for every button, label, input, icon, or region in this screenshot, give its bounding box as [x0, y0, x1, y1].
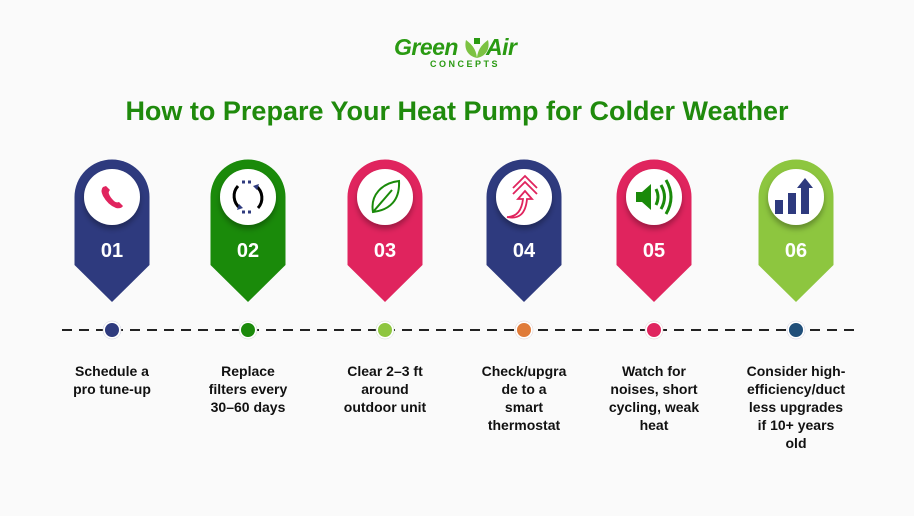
pin 02: 02 — [237, 240, 259, 262]
pin 03 — [348, 160, 422, 339]
label 04: smart — [505, 399, 543, 415]
label 05 — [609, 363, 700, 433]
pin 01 — [74, 160, 150, 339]
label 04: de to a — [501, 381, 547, 397]
pin 05 — [616, 160, 692, 339]
label 06 — [747, 363, 845, 451]
label 06: less upgrades — [749, 399, 843, 415]
label 04 — [482, 363, 566, 433]
label 01 — [73, 363, 151, 397]
pin 03: 03 — [374, 240, 396, 262]
label 05: Watch for — [622, 363, 686, 379]
label 06: if 10+ years — [758, 417, 834, 433]
label 03: Clear 2–3 ft — [347, 363, 423, 379]
pin 01: 01 — [101, 240, 123, 262]
pin 06 — [758, 160, 834, 339]
label 06: Consider high- — [747, 363, 845, 379]
label 05: heat — [640, 417, 668, 433]
pin 06: 06 — [785, 240, 807, 262]
label 04: Check/upgra — [482, 363, 566, 379]
pin 02 — [210, 160, 286, 339]
pin 04 — [486, 160, 562, 339]
label 03: outdoor unit — [344, 399, 426, 415]
label 05: cycling, weak — [609, 399, 699, 415]
label 01: Schedule a — [75, 363, 149, 379]
label 06: efficiency/duct — [747, 381, 845, 397]
label 06: old — [786, 435, 806, 451]
logo: CONCEPTS — [430, 59, 500, 69]
label 04: thermostat — [488, 417, 560, 433]
title: How to Prepare Your Heat Pump for Colder Weather — [125, 96, 789, 126]
pin 04: 04 — [513, 240, 536, 262]
label 02: filters every — [209, 381, 287, 397]
pin 05: 05 — [643, 240, 665, 262]
label 03: around — [361, 381, 409, 397]
label 03 — [344, 363, 426, 415]
logo: Green Air — [394, 34, 516, 60]
label 02: Replace — [221, 363, 275, 379]
label 05: noises, short — [610, 381, 698, 397]
label 02 — [209, 363, 288, 415]
label 01: pro tune-up — [73, 381, 151, 397]
label 02: 30–60 days — [211, 399, 285, 415]
